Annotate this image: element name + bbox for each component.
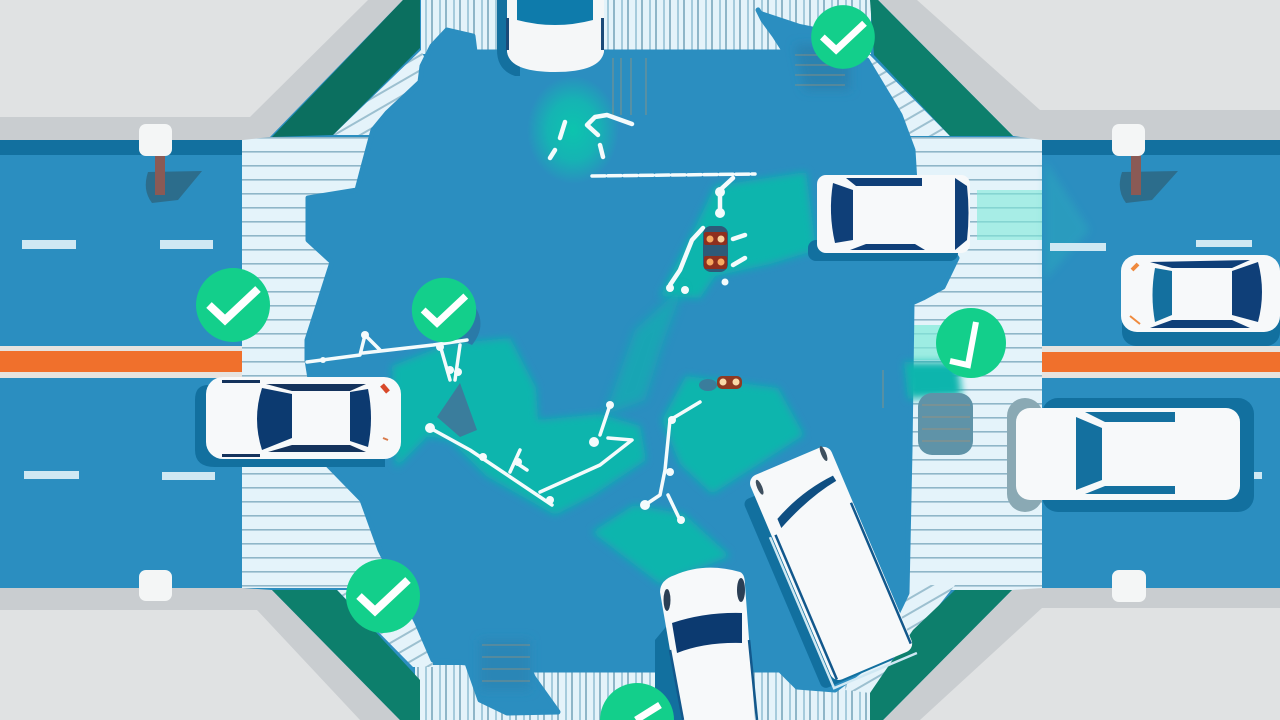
check badge: right [936,308,1006,378]
small robot car: upper [703,226,728,272]
right road glow [1045,160,1090,280]
check badge: left road [196,268,270,342]
left crosswalk [242,137,382,588]
right crosswalk [900,137,1042,590]
sidewalk: top left [0,0,420,140]
car: bottom [655,568,757,720]
van body [745,443,917,688]
sidewalk: bottom left [0,588,420,720]
teal fade down the centre [605,285,684,415]
van shadow [743,470,896,690]
sidewalk: top right [870,0,1280,140]
bottom crosswalk [415,665,871,720]
car: left [195,377,401,467]
central blue junction [307,10,957,713]
white route traces [307,115,755,520]
teal path zones [392,172,962,584]
check badge: bottom [600,683,674,720]
lane markings [22,240,1262,480]
diagonal crosswalk corners [333,45,955,693]
blue junction top right lobe [758,10,870,70]
top teal glow [527,76,619,184]
dark kerb strips [0,138,1280,155]
route trace nodes [320,187,728,524]
orange median: left [0,346,242,378]
top crosswalk [421,0,871,54]
check badge: left centre [412,278,476,342]
check badge: lower left [346,559,420,633]
car: right upper [808,175,970,261]
dark shadow patches [437,45,973,690]
orange median: right [1042,346,1280,378]
teal glow on right centre crosswalk [912,325,942,360]
faint orange ghost stripes [482,55,970,681]
car: right middle [1121,255,1280,346]
check badge: top [811,5,875,69]
car: top [497,0,604,76]
bollards and shadows [139,124,1178,602]
car: right lower [1007,398,1254,512]
teal glow on right crosswalk [977,190,1042,240]
small robot car: lower [699,376,742,391]
van: diagonal [735,443,917,692]
sidewalk: bottom right [870,588,1280,720]
